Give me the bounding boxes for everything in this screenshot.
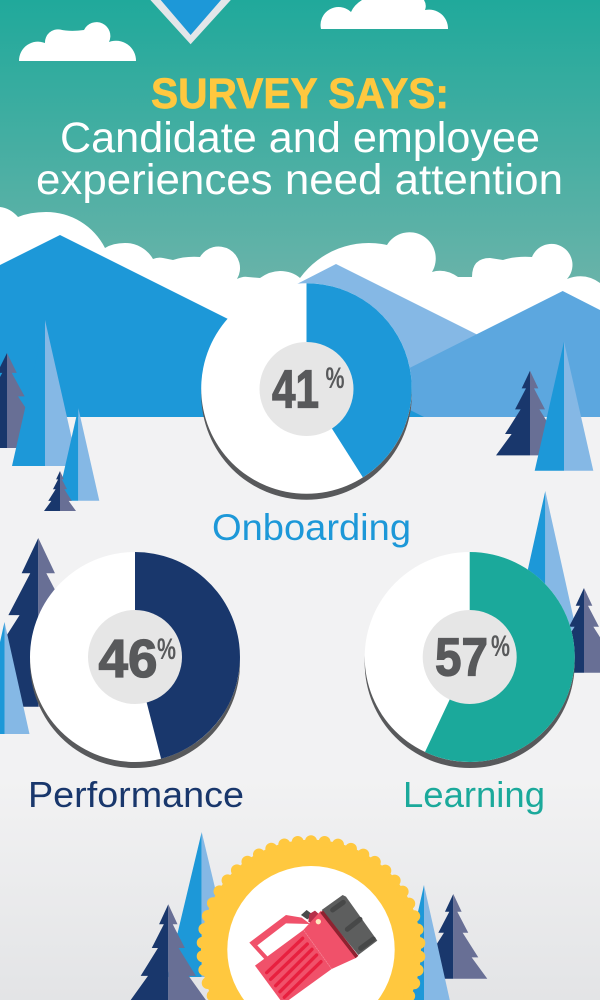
lantern band [322, 912, 357, 957]
lantern grips [333, 902, 373, 948]
title: SURVEY SAYS: [151, 70, 449, 118]
badge scalloped edge [201, 840, 421, 1000]
cone tree: right [535, 342, 593, 471]
fir tree: behind performance chart [0, 538, 106, 707]
label: onboarding: Onboarding [212, 507, 411, 548]
title: Candidate and employee [60, 114, 540, 162]
fir tree: small left [44, 471, 76, 511]
badge: lantern seal [201, 840, 421, 1000]
donut chart: learning 57% [365, 552, 575, 768]
cone tree: left short [57, 408, 99, 501]
sky background [0, 0, 600, 420]
title: experiences need attention [36, 156, 563, 204]
mountain: mid blue right [312, 291, 600, 417]
donut chart: performance 46%: % [157, 633, 176, 666]
cone tree: bottom left [167, 832, 236, 977]
lantern lamp dot [316, 919, 321, 924]
donut chart: learning 57%: % [491, 630, 510, 663]
cone tree: bottom right [396, 885, 452, 1000]
lantern head [322, 895, 377, 955]
icon: lantern [249, 895, 377, 1000]
lantern seam [304, 931, 332, 969]
fir tree: far left [0, 353, 47, 448]
label: learning: Learning [403, 774, 545, 815]
mountain: bright blue left [0, 235, 424, 417]
label: performance: Performance [28, 774, 244, 815]
cloud: top left [19, 22, 136, 61]
cloud: top right [321, 0, 448, 29]
horizon clouds [0, 207, 600, 420]
icon: blue pennant [150, 0, 231, 44]
fir tree: right [496, 371, 564, 455]
donut chart: onboarding 41%: 41 [272, 360, 319, 420]
lantern ribs [267, 938, 321, 997]
donut chart: performance 46%: 46 [98, 629, 158, 689]
cone tree: left tall [12, 320, 78, 466]
donut chart: learning 57%: 57 [435, 628, 488, 688]
title [36, 70, 563, 204]
lantern switch [301, 910, 313, 919]
cone tree: behind learning chart [513, 491, 577, 635]
fir tree: behind learning chart [550, 588, 600, 673]
mountain: light blue [295, 264, 500, 417]
fir tree: bottom left [131, 904, 206, 1000]
fir tree: bottom right [419, 894, 487, 979]
lantern body [255, 930, 332, 1000]
donut chart: onboarding 41% [201, 283, 412, 500]
donut chart: performance 46% [30, 552, 240, 768]
donut chart: onboarding 41%: % [326, 362, 344, 395]
badge white center [227, 866, 395, 1000]
cone tree: left of performance chart [0, 622, 30, 734]
snow ground [0, 417, 600, 1000]
lantern handle [249, 915, 313, 962]
